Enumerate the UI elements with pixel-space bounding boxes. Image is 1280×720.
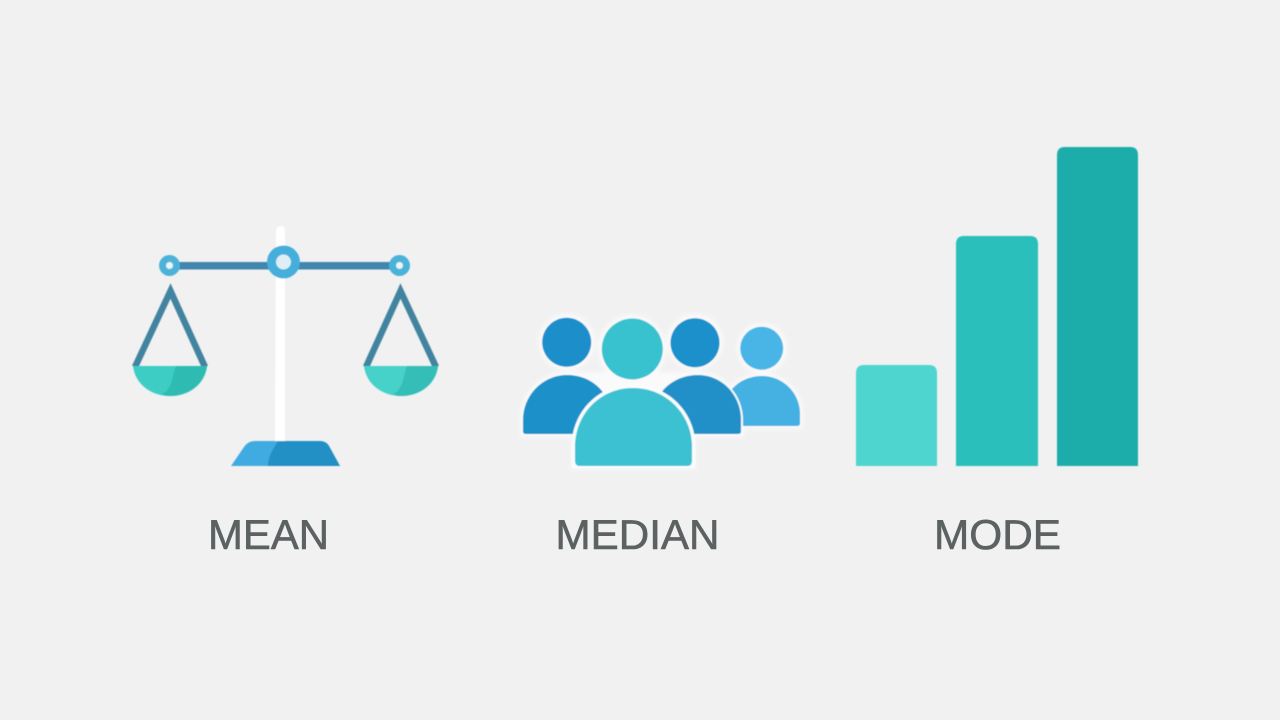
scale beam	[170, 262, 400, 270]
label: median: MEDIAN	[556, 511, 720, 558]
tall bar	[1057, 147, 1138, 466]
medium bar	[956, 236, 1038, 466]
right beam joint	[389, 255, 410, 276]
far right person	[723, 327, 800, 426]
left person	[523, 318, 611, 434]
middle person	[572, 318, 696, 468]
left beam joint	[159, 255, 180, 276]
short bar	[856, 365, 937, 466]
right person	[651, 318, 743, 436]
icon: balance scale (mean)	[133, 226, 438, 466]
label: mean: MEAN	[208, 511, 329, 558]
label: mode: MODE	[934, 511, 1061, 558]
left pan	[133, 291, 207, 396]
white halo behind people	[523, 317, 800, 466]
scale pole	[275, 226, 285, 441]
icon: bar chart (mode)	[856, 147, 1138, 466]
icon: group of people (median)	[523, 317, 800, 468]
right pan	[364, 291, 438, 396]
center pivot	[267, 246, 300, 278]
scale base	[231, 441, 340, 466]
